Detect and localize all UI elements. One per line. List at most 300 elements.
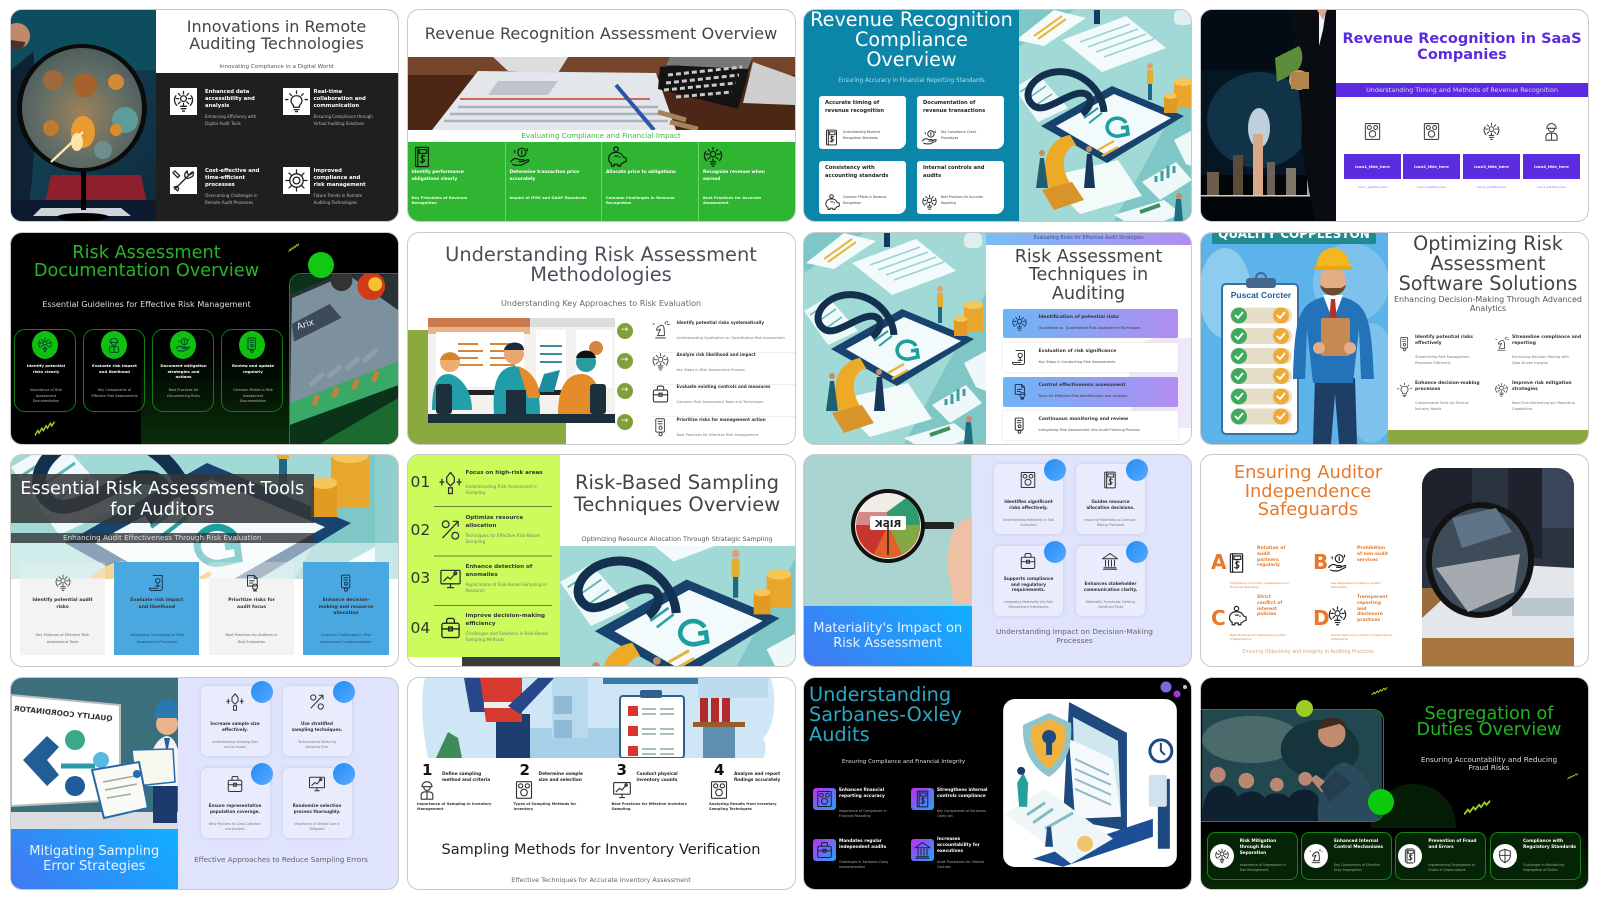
glass card 3 — [994, 546, 1063, 616]
card: internal control: Control Mechanisms — [1334, 845, 1383, 850]
glass card 3: Ensure representative — [209, 803, 261, 808]
glass card 1 — [200, 686, 270, 756]
subtitle: Processes — [1056, 636, 1093, 645]
item B: Objectivity — [1331, 585, 1347, 589]
title — [1201, 464, 1415, 520]
card: risk mitigation: through Role — [1240, 845, 1271, 850]
item D: Recent Reforms in Auditor Independence — [1331, 633, 1393, 637]
item 4: Integrating Risk Assessment into Audit Planning Process — [1038, 428, 1140, 432]
image: magnifier over documents — [1422, 468, 1574, 666]
column 3: icon3_subtitle_here — [1477, 185, 1506, 189]
panel: Revenue Recognition in SaaS Companies — [1201, 10, 1588, 221]
card: accurate timing: revenue recognition — [825, 108, 884, 114]
item 3: Implementation — [839, 865, 865, 869]
card: prevention — [1395, 832, 1486, 880]
number: 2 — [520, 760, 530, 778]
banner subtitle — [986, 232, 1191, 245]
title — [809, 684, 999, 745]
glass card 4: Mitigation — [309, 827, 325, 831]
item 4: Increases — [937, 836, 960, 842]
item 1: Identify potential risks systematically — [676, 320, 764, 324]
panel: Ensuring Auditor Independence Safeguards — [1201, 455, 1588, 666]
image: inspector with checklist — [1201, 232, 1388, 444]
item: allocate price: Allocate price to obligations — [606, 170, 676, 175]
item: allocate price: Common Challenges in Revenue — [606, 195, 675, 200]
item A: regularly — [1257, 563, 1280, 568]
item D: reporting and — [1357, 601, 1381, 612]
step 3: Sampling — [612, 806, 630, 810]
card: internal controls — [917, 161, 1004, 214]
glass card 3: requirements. — [1012, 587, 1045, 592]
accent: green circle — [1368, 789, 1394, 815]
item: collaboration: collaboration and — [314, 96, 366, 102]
row 01: Understanding Risk Assessment in — [466, 484, 538, 489]
number: 01 — [410, 473, 430, 491]
title — [986, 248, 1191, 303]
card: review: Review and update — [232, 363, 274, 368]
card: documentation: Procedures — [941, 136, 958, 140]
icon: worker — [417, 778, 437, 800]
panel: Understanding Sarbanes-Oxley Audits — [804, 678, 1191, 888]
panel: Essential Risk Assessment Tools for Auditors — [10, 455, 398, 666]
card: compliance: Challenges in Maintaining — [1523, 863, 1564, 867]
card: consistency: Common Pitfalls in Revenue — [843, 195, 886, 199]
glass card 4 — [282, 768, 352, 838]
title — [1388, 234, 1588, 294]
glow: dark green backdrop — [140, 348, 310, 444]
icon: phone — [655, 418, 665, 436]
card: evaluate impact: Effective Risk Assessments — [91, 394, 138, 398]
image: inspector with checklist: Puscat Corcter — [1231, 290, 1292, 300]
item 4: Audit Procedures for Internal — [937, 860, 984, 864]
panel: Risk Assessment Techniques in Auditing — [804, 232, 1191, 444]
item 4: Real-Time Monitoring and Reporting — [1512, 400, 1575, 404]
icon: gear — [170, 88, 197, 115]
title box — [1463, 154, 1520, 179]
item: cost effective: processes — [205, 182, 235, 188]
item 3: Tools for Effective Risk Identification and Analysis — [1038, 394, 1127, 398]
item: cost effective: Overcoming Challenges in — [205, 193, 258, 198]
item: improved compliance: compliance and — [314, 175, 360, 181]
accent: squiggle right — [1567, 772, 1582, 780]
glass card 1: Increase sample size — [210, 721, 260, 726]
card: compliance — [1490, 832, 1581, 880]
column 3 — [1463, 122, 1520, 189]
title: Risk Assessment — [1015, 246, 1162, 266]
title: Segregation of — [1424, 704, 1554, 724]
title box: icon2_title_here — [1414, 164, 1449, 169]
banner subtitle — [1336, 83, 1588, 97]
step 1 — [417, 760, 509, 822]
row 03: anomalies — [466, 572, 498, 578]
row 03 — [410, 567, 556, 604]
title block — [804, 606, 972, 666]
panel: Ensuring Auditor Independence Safeguards: Strict — [1257, 595, 1271, 600]
card: evaluate: Assessment Processes — [137, 640, 177, 644]
image: isometric documents — [1019, 10, 1191, 221]
glass card 3: Integrating Materiality into Risk — [1004, 600, 1053, 604]
card: prioritize: Best Practices for Auditors in — [226, 633, 277, 637]
title — [1342, 31, 1582, 62]
title: Documentation Overview — [34, 261, 259, 281]
title: Independence — [1245, 480, 1371, 502]
icon: piggy bank — [825, 194, 840, 210]
card: risk mitigation: Separation — [1240, 851, 1266, 856]
glass card 1: and Its Impact — [224, 745, 246, 749]
row 02: Sampling — [466, 539, 485, 544]
card: identify: Identify potential audit — [32, 598, 93, 603]
card: internal controls: audits — [923, 173, 941, 179]
card: identify risks: risks clearly — [33, 369, 59, 374]
icon: phone — [1010, 416, 1028, 434]
item: data accessibility — [170, 88, 256, 126]
icon: briefcase — [438, 616, 462, 640]
card: accurate timing — [819, 96, 906, 148]
item: allocate price — [601, 142, 698, 221]
card: internal controls: Best Practices for Accurate — [941, 195, 983, 199]
panel: Sampling Methods for Inventory Verification — [408, 678, 794, 888]
item 4: Continuous monitoring and review — [1038, 416, 1128, 422]
image: warehouse inspector with clipboard — [408, 678, 794, 758]
item 3: independent audits — [839, 845, 886, 850]
image: isometric documents — [560, 546, 794, 666]
title: Auditing — [1052, 284, 1125, 304]
icon: seal — [242, 574, 262, 592]
title: Ensuring Auditor — [1234, 462, 1382, 483]
item: recognize revenue — [698, 142, 795, 221]
subtitle: Understanding Key Approaches to Risk Evaluation — [501, 298, 701, 308]
glass card 4: communication clarity. — [1084, 587, 1137, 592]
card: consistency: Consistency with — [825, 165, 875, 171]
icon: seal — [1010, 382, 1028, 400]
image: team at a risk dashboard — [428, 318, 615, 423]
item 3: processes — [1415, 387, 1440, 392]
item 1: Qualitative vs. Quantitative Risk Assessment Techniques — [1038, 326, 1140, 330]
card: evaluate — [114, 562, 199, 655]
title block: Materiality's Impact on — [813, 621, 962, 636]
card: enhance — [303, 562, 388, 655]
card: documentation: Key Compliance Check — [941, 130, 976, 134]
item 2 — [911, 788, 1003, 826]
glass card 4: Enhances stakeholder — [1085, 581, 1136, 586]
icon: book — [826, 130, 837, 146]
item: recognize revenue: Assessment — [703, 200, 729, 205]
item: recognize revenue: earned — [703, 177, 720, 182]
title overlay: Essential Risk Assessment Tools — [20, 478, 304, 499]
title: Assessment — [1430, 252, 1546, 275]
icon: bulb — [1397, 380, 1412, 398]
image: isometric documents — [804, 233, 986, 444]
item D — [1313, 599, 1413, 644]
card: identify risks: Importance of Risk — [30, 388, 62, 392]
glass card 2: Techniques for Reducing — [298, 740, 336, 744]
glass card 2: Impact of Materiality on Decision- — [1084, 518, 1137, 522]
glass card 3: and regulatory — [1011, 582, 1046, 587]
column 1 — [1344, 123, 1401, 189]
item: improved compliance: Auditing Technologies — [314, 200, 357, 205]
card: evaluate: Integrating Technology in Risk — [130, 633, 184, 637]
arrow 4: → — [621, 416, 628, 426]
icon: briefcase — [1018, 552, 1038, 570]
item: data accessibility: Digital Audit Tools — [205, 121, 241, 126]
item 3: Mandates regular — [839, 838, 882, 844]
card: risk mitigation: Risk Mitigation — [1240, 839, 1276, 844]
title: Companies — [1417, 46, 1507, 62]
icon: green disc worker — [100, 331, 126, 359]
header: title block — [156, 10, 398, 73]
title box — [1523, 154, 1580, 179]
card: review: regularly — [243, 369, 263, 374]
item 4: executives — [937, 849, 963, 854]
glass card 2 — [282, 686, 352, 756]
item 3: Common Risk Assessment Tools and Techniques — [676, 400, 763, 404]
card: documentation: revenue transactions — [923, 108, 985, 114]
item C: conflict of — [1257, 601, 1282, 606]
item 1: reporting accuracy — [839, 794, 885, 799]
number: 1 — [422, 760, 432, 778]
subtitle: Evaluating Compliance and Financial Impact — [521, 131, 681, 140]
number: 03 — [410, 569, 430, 587]
title block: Risk Assessment — [833, 636, 942, 651]
card: review: Common Pitfalls in Risk — [233, 388, 273, 392]
icon: monitor — [438, 567, 462, 591]
glass card 2: Guides resource — [1091, 499, 1130, 504]
item A: Financial Reporting — [1230, 585, 1259, 589]
decor: purple dots — [1156, 680, 1191, 706]
subtitle: Ensuring Accountability and Reducing — [1421, 754, 1557, 764]
step 2: Determine sample — [538, 772, 583, 776]
card: prioritize: Risk Evaluation — [238, 640, 265, 644]
row 04: Sampling Methods — [466, 637, 504, 642]
subtitle — [1388, 294, 1588, 314]
arrow 2 — [616, 353, 632, 369]
title — [810, 10, 1013, 71]
glow: dark green backdrop — [1371, 784, 1456, 888]
row 01: Sampling — [466, 490, 485, 495]
fade between image and footer — [10, 543, 398, 579]
icon: gear — [922, 194, 937, 210]
item 2 — [1002, 342, 1178, 372]
subtitle: Innovating Compliance in a Digital World — [219, 64, 334, 70]
panel: Understanding Risk Assessment Methodologies — [408, 232, 794, 444]
glass card 4: Importance of Sample Size in — [294, 822, 340, 826]
item D: practices — [1357, 618, 1380, 623]
card: internal control: Duty Segregation — [1334, 868, 1362, 872]
glass card 4 — [1076, 546, 1145, 616]
icon: case — [652, 386, 668, 402]
item D: Safeguards — [1331, 637, 1348, 641]
glass card 2 — [1076, 464, 1145, 534]
step 2 — [514, 760, 606, 822]
card: internal control — [1301, 832, 1392, 880]
icon: phone — [1397, 334, 1412, 352]
item: collaboration: Virtual Auditing Solutions — [314, 121, 364, 126]
step 4 — [709, 760, 794, 822]
step 3 — [612, 760, 704, 822]
title: Sarbanes-Oxley — [809, 703, 962, 726]
card: mitigation: strategies and — [168, 369, 199, 374]
subtitle band: Enhancing Audit Effectiveness Through Risk Evaluation — [63, 533, 261, 542]
title: Understanding Risk Assessment — [445, 242, 757, 266]
icon: white disc shield — [1493, 844, 1517, 868]
bottom dark-green fade — [1201, 828, 1588, 888]
decor: olive block — [408, 330, 566, 444]
card: identify risks — [14, 329, 76, 412]
subtitle: Fraud Risks — [1468, 763, 1510, 772]
left lime panel — [408, 455, 560, 657]
item A — [1211, 545, 1311, 590]
subtitle: Ensuring Accuracy in Financial Reporting Standards — [838, 78, 985, 84]
item 2 — [1494, 334, 1590, 374]
panel: Ensuring Auditor Independence Safeguards: Transparent — [1357, 595, 1388, 600]
item: performance obligations: Identify performance — [412, 170, 464, 175]
card: identify: risks — [56, 605, 69, 610]
card: review: Assessment — [243, 394, 263, 398]
icon: piggy bank — [608, 146, 627, 167]
card: prioritize — [208, 562, 294, 655]
title: Revenue Recognition in SaaS — [1342, 31, 1582, 47]
item 2: Enhancing Decision-Making with — [1512, 354, 1569, 358]
card: accurate timing: Understanding Revenue — [843, 130, 880, 134]
arrow 2: → — [621, 355, 628, 365]
item C: Independence — [1230, 637, 1251, 641]
panel: Risk-Based Sampling Techniques Overview — [408, 455, 794, 666]
item 4 — [1494, 380, 1590, 420]
step 1: method and criteria — [442, 778, 490, 783]
item: improved compliance: Future Trends in Remote — [314, 193, 362, 198]
icon: gear — [1327, 604, 1348, 628]
title — [560, 472, 794, 516]
row 02 — [410, 518, 556, 555]
image: risk gauge under magnifier — [804, 455, 972, 606]
icon: monitor — [612, 778, 632, 800]
image: tablet with green chart: Arix — [295, 317, 315, 332]
row 04 — [410, 616, 556, 656]
card: consistency: accounting standards — [825, 173, 888, 179]
item 3 — [1397, 380, 1493, 420]
item: transaction price — [504, 142, 602, 221]
icon: gradient book — [911, 788, 934, 810]
icon: gear — [52, 574, 72, 592]
title box — [1344, 154, 1401, 179]
icon: people at desk — [1364, 123, 1380, 140]
icon: book — [1100, 471, 1120, 489]
title: Techniques in — [1029, 265, 1148, 285]
column 2 — [1403, 123, 1460, 189]
title: Safeguards — [1258, 499, 1358, 520]
image: paperwork and calculator on a desk — [408, 57, 795, 130]
item 3 — [813, 838, 907, 876]
title: Revenue Recognition Assessment Overview — [425, 24, 777, 43]
icon: piggy bank — [1226, 604, 1247, 628]
title — [187, 17, 366, 53]
item 2 — [650, 352, 794, 385]
icon: bank — [1100, 552, 1120, 570]
icon: green disc phone — [239, 331, 265, 359]
title: Innovations in Remote — [187, 17, 366, 36]
item 2: Key Steps in Conducting Risk Assessments — [1038, 360, 1115, 364]
accent: squiggle bottom — [34, 421, 55, 436]
column 1: icon1_subtitle_here — [1358, 185, 1387, 189]
icon: gear — [1010, 314, 1028, 332]
card: enhance: Common Challenges in Risk — [321, 633, 371, 637]
item 2: Oxley Act — [937, 814, 953, 818]
item 2: Streamline compliance and — [1512, 334, 1581, 340]
glass card 3: Supports compliance — [1004, 576, 1053, 581]
title block: Mitigating Sampling — [29, 844, 159, 858]
icon: dollar — [224, 693, 244, 711]
card: internal control: Enhanced Internal — [1334, 839, 1378, 844]
card: internal controls: Reporting — [941, 201, 956, 205]
item 4: accountability for — [937, 843, 980, 848]
item: improved compliance — [283, 167, 366, 205]
row 03: Applications of Risk-Based Sampling in — [466, 582, 547, 587]
card: identify — [20, 562, 105, 655]
card: mitigation — [152, 329, 214, 412]
row 03: Research — [466, 588, 485, 593]
row 04: Challenges and Solutions in Risk-Based — [466, 631, 548, 636]
item A: Rotation of — [1257, 546, 1285, 551]
item C: policies — [1257, 612, 1276, 617]
item 2: Strengthens internal — [937, 788, 988, 792]
item 2: reporting — [1512, 341, 1536, 346]
card: review — [221, 329, 283, 412]
column 4 — [1523, 123, 1580, 189]
item D: disclosure — [1357, 612, 1383, 617]
glass card 2: Use stratified — [301, 721, 333, 726]
icon: gradient safe — [813, 788, 836, 810]
title: Sampling Methods for Inventory Verification — [442, 842, 760, 858]
item 4 — [655, 416, 766, 436]
item: improved compliance: Improved — [314, 168, 342, 174]
item 4: strategies — [1512, 387, 1538, 392]
icon: gear — [652, 353, 668, 370]
item 4 — [1002, 410, 1178, 440]
title: Auditing Technologies — [189, 34, 364, 53]
subtitle band — [10, 533, 314, 543]
step 2: Inventory — [514, 806, 533, 810]
column 2: icon2_subtitle_here — [1417, 185, 1446, 189]
letter: D — [1313, 606, 1330, 630]
card: mitigation: Document mitigation — [160, 363, 207, 368]
icon: scroll — [147, 574, 167, 592]
panel: Revenue Recognition Assessment Overview — [408, 10, 794, 221]
item: performance obligations: obligations clearly — [412, 177, 457, 182]
card: risk mitigation: Risk Management — [1240, 868, 1268, 872]
item 4: Controls — [937, 865, 951, 869]
card: documentation — [917, 96, 1004, 148]
item B: of non-audit — [1357, 552, 1388, 557]
item: recognize revenue: Best Practices for Accurate — [703, 195, 761, 200]
column 4: icon4_subtitle_here — [1537, 185, 1566, 189]
row 02: Techniques for Effective Risk-Based — [466, 533, 540, 538]
image: tablet with green chart — [288, 272, 398, 444]
card: mitigation: Best Practices for — [169, 388, 198, 392]
item 3 — [1002, 376, 1178, 406]
panel: Optimizing Risk Assessment Software Solutions — [1201, 232, 1588, 444]
item: transaction price: Determine transaction price — [510, 170, 579, 175]
item B: Key Regulations Ensuring Auditor — [1331, 581, 1381, 585]
card: enhance: Enhance decision- — [323, 598, 369, 603]
title: Techniques Overview — [574, 493, 780, 516]
item 3: Evaluate existing controls and measures — [676, 384, 770, 389]
accent: squiggle top — [1371, 686, 1393, 696]
item B: Prohibition — [1357, 546, 1385, 551]
icon: percent arrows — [438, 518, 462, 542]
item A: audit — [1257, 552, 1270, 557]
item 1: Enhances financial — [839, 788, 884, 792]
icon: safe — [709, 778, 729, 800]
